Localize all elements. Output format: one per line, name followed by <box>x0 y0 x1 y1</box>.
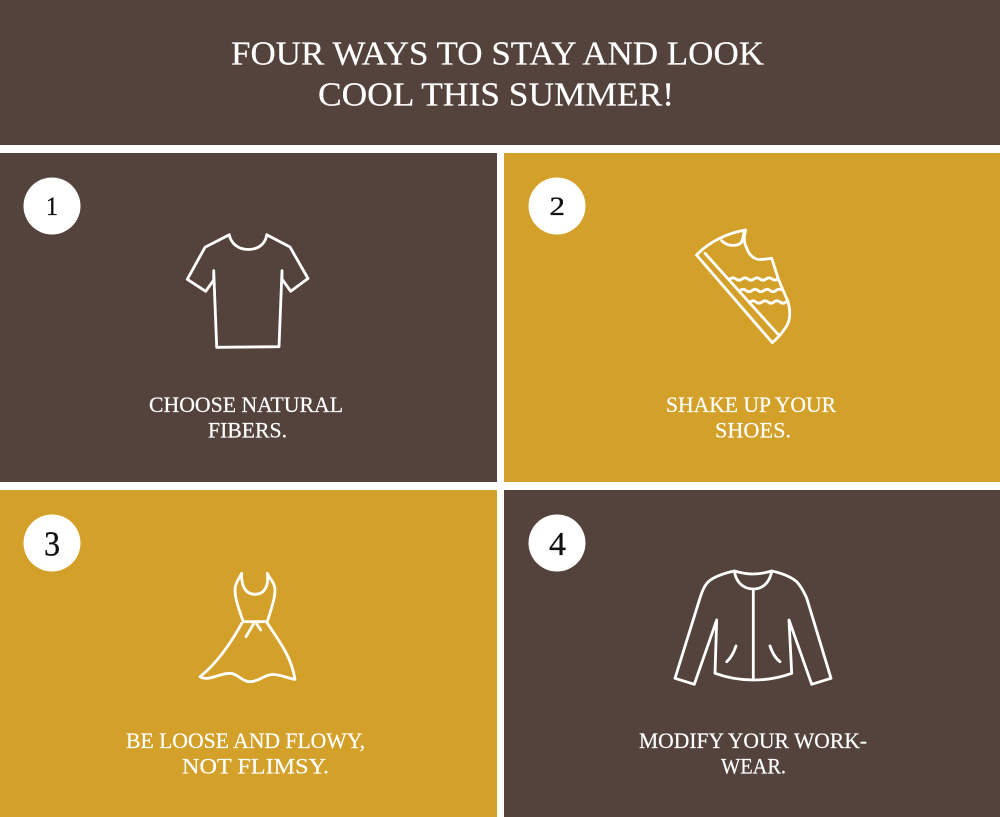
icon: t-shirt <box>187 235 308 347</box>
number badge 1: 1 <box>46 192 58 221</box>
label: shake up your shoes <box>666 392 836 442</box>
panel 3: loose and flowy <box>0 490 497 817</box>
label: choose natural fibers: FIBERS. <box>208 418 287 442</box>
label: shake up your shoes: SHOES. <box>715 418 791 442</box>
label: shake up your shoes: SHAKE UP YOUR <box>666 392 836 417</box>
label: choose natural fibers: CHOOSE NATURAL <box>149 392 343 417</box>
label: choose natural fibers <box>149 392 343 442</box>
title banner: COOL THIS SUMMER! <box>318 76 674 114</box>
icon: dress <box>200 573 295 682</box>
number badge 4: 4 <box>549 526 566 563</box>
label: be loose and flowy: NOT FLIMSY. <box>182 754 329 778</box>
number badge 3: 3 <box>44 524 60 564</box>
icon: sneaker <box>696 230 790 343</box>
label: be loose and flowy <box>126 728 365 778</box>
title banner: FOUR WAYS TO STAY AND LOOK <box>231 36 764 72</box>
title banner <box>0 0 1000 145</box>
number badge 2 <box>528 178 586 234</box>
label: be loose and flowy: BE LOOSE AND FLOWY, <box>126 728 365 753</box>
label: modify your work-wear: WEAR. <box>721 754 786 778</box>
panel 2: shoes <box>504 153 1000 482</box>
panel 1: natural fibers <box>0 153 497 482</box>
label: modify your work-wear <box>639 728 867 778</box>
number badge 3 <box>24 514 80 572</box>
number badge 1 <box>24 178 80 234</box>
number badge 2: 2 <box>550 192 565 221</box>
label: modify your work-wear: MODIFY YOUR WORK- <box>639 728 867 753</box>
icon: jacket <box>675 571 831 684</box>
number badge 4 <box>528 514 586 572</box>
panel 4: modify work-wear <box>504 490 1000 817</box>
